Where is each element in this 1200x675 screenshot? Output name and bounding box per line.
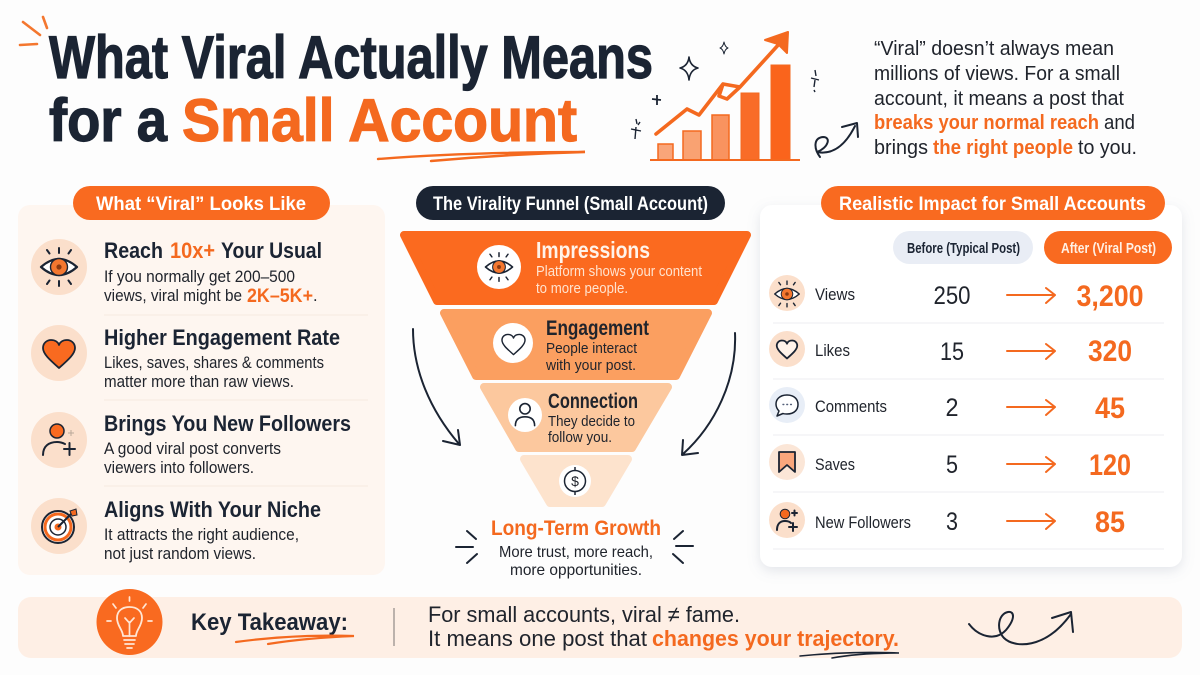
intro paragraph: to you. [1078, 136, 1137, 159]
funnel stage: connection [484, 387, 668, 448]
funnel stage: connection: follow you. [548, 429, 612, 446]
row: new followers: 85 [1095, 506, 1125, 539]
row: new followers: 3 [946, 508, 958, 536]
panel: key takeaway [18, 589, 1182, 658]
funnel heading pill: The Virality Funnel (Small Account) [433, 193, 708, 215]
title line two: Small Account [182, 87, 577, 154]
item: new followers: Brings You New Followers [104, 411, 351, 436]
funnel stage: impressions: to more people. [536, 280, 628, 297]
takeaway statement: changes your trajectory. [652, 626, 899, 651]
row: comments [769, 387, 1125, 425]
title [20, 17, 653, 161]
row: saves: 120 [1089, 449, 1131, 482]
column header: after [1044, 231, 1172, 264]
row: comments: 2 [946, 394, 958, 422]
item: aligns with niche: It attracts the right audience, [104, 526, 299, 544]
funnel stage: growth tip [524, 459, 628, 503]
funnel stage: engagement: with your post. [545, 357, 636, 374]
item: reach 10x: If you normally get 200–500 [104, 268, 295, 286]
funnel stage: engagement [444, 313, 708, 376]
row: views [769, 275, 1144, 313]
row: likes [769, 331, 1132, 368]
intro paragraph [874, 37, 1137, 159]
intro paragraph: brings [874, 136, 928, 159]
takeaway statement: It means one post that [428, 626, 648, 651]
item: aligns with niche: Aligns With Your Niche [104, 497, 321, 522]
item: higher engagement rate: Higher Engagement Rate [104, 325, 340, 350]
intro paragraph: and [1104, 111, 1135, 134]
row: saves: Saves [815, 455, 855, 474]
intro paragraph: millions of views. For a small [874, 62, 1120, 85]
bars [650, 65, 800, 160]
panel heading pill: What “Viral” Looks Like [96, 193, 306, 215]
title line one: What Viral Actually Means [49, 24, 653, 91]
funnel stage: impressions: Platform shows your content [536, 263, 703, 280]
key takeaway label: Key Takeaway: [191, 609, 348, 636]
arrow: right funnel side [682, 333, 735, 455]
item: reach 10x [31, 238, 322, 307]
rising arrow [656, 32, 788, 134]
intro paragraph: “Viral” doesn’t always mean [874, 37, 1114, 60]
swirl arrow [969, 612, 1073, 644]
item: higher engagement rate: matter more than raw views. [104, 373, 294, 391]
title accent sparks [20, 17, 47, 45]
row: likes: 320 [1088, 335, 1132, 368]
row: likes: 15 [940, 338, 964, 366]
item: new followers [31, 411, 351, 477]
column header: after: After (Viral Post) [1061, 241, 1156, 257]
item: reach 10x: 10x+ [170, 238, 215, 263]
item: higher engagement rate [31, 325, 340, 391]
curly arrow to intro [815, 123, 858, 157]
intro paragraph: the right people [933, 136, 1073, 159]
row: views: 3,200 [1076, 280, 1144, 313]
funnel stage: engagement: Engagement [546, 317, 649, 340]
arrow: left funnel side [413, 329, 460, 445]
intro paragraph: breaks your normal reach [874, 111, 1099, 134]
item: reach 10x: views, viral might be [104, 287, 242, 305]
panel: what viral looks like [18, 186, 385, 575]
item: new followers: viewers into followers. [104, 459, 254, 477]
row: comments: Comments [815, 397, 887, 416]
icon: light bulb [96, 589, 162, 655]
item: new followers: A good viral post converts [104, 440, 281, 458]
item: reach 10x: Reach [104, 238, 163, 263]
funnel stage: engagement: People interact [546, 340, 638, 357]
column header: before: Before (Typical Post) [907, 241, 1020, 257]
funnel heading pill [416, 186, 725, 220]
funnel stage: connection: Connection [548, 390, 638, 413]
funnel stage: impressions: Impressions [536, 237, 650, 263]
item: higher engagement rate: Likes, saves, shares & comments [104, 354, 324, 372]
row: new followers: New Followers [815, 513, 911, 532]
funnel stage: growth tip: $ [571, 473, 579, 489]
panel: realistic impact [760, 186, 1182, 567]
item: reach 10x: . [313, 287, 318, 305]
row: views: Views [815, 285, 855, 304]
item: reach 10x: 2K–5K+ [247, 286, 313, 307]
item: reach 10x: Your Usual [221, 238, 322, 263]
panel: virality funnel [404, 186, 747, 579]
row: views: 250 [934, 282, 970, 310]
row: saves [769, 444, 1131, 482]
impact heading pill [821, 186, 1165, 220]
item: aligns with niche: not just random views. [104, 545, 256, 563]
row: new followers [769, 502, 1125, 539]
growth chart illustration [631, 32, 819, 160]
long-term growth outcome [456, 517, 693, 579]
funnel stage: connection: They decide to [548, 413, 635, 430]
row: saves: 5 [946, 451, 958, 479]
long-term growth outcome: More trust, more reach, [499, 544, 653, 561]
sparkles [631, 42, 819, 139]
intro paragraph: account, it means a post that [874, 87, 1124, 110]
funnel stage: impressions [404, 235, 747, 301]
title underline scribble [378, 152, 585, 161]
impact heading pill: Realistic Impact for Small Accounts [839, 193, 1146, 215]
long-term growth outcome: more opportunities. [510, 562, 642, 579]
long-term growth outcome: Long-Term Growth [491, 517, 661, 540]
row: likes: Likes [815, 341, 850, 360]
row: comments: 45 [1095, 392, 1125, 425]
takeaway statement [428, 602, 899, 658]
column header: before [893, 231, 1033, 264]
title line two: for a [49, 87, 168, 154]
item: aligns with niche [31, 497, 321, 563]
takeaway statement: For small accounts, viral ≠ fame. [428, 602, 740, 627]
panel heading pill [73, 186, 330, 220]
